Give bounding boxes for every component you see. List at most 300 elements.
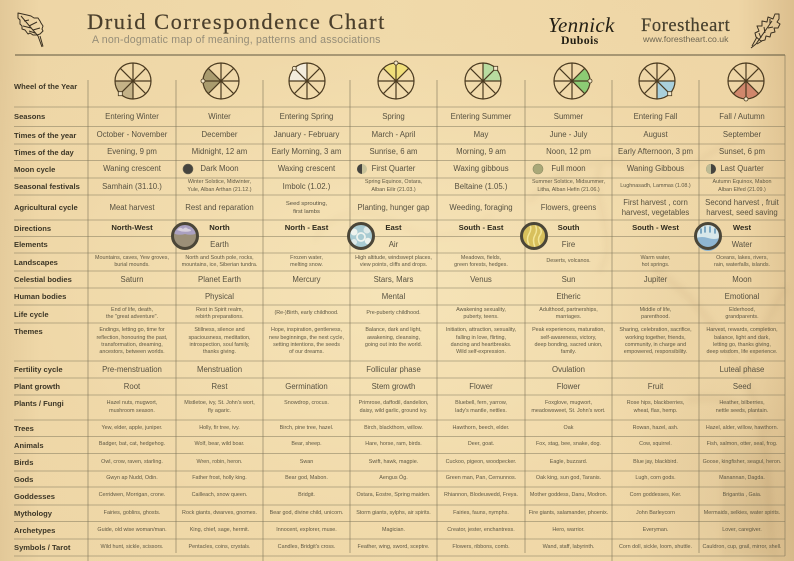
row: agricultural cycle: Agricultural cycle xyxy=(14,203,78,212)
row: gods: Aengus Óg. xyxy=(379,475,408,481)
row: agricultural cycle: Rest and reparation xyxy=(185,203,254,212)
row: themes: going out into the world. xyxy=(365,342,422,348)
row: fertility cycle xyxy=(14,365,764,374)
row: fertility cycle: Follicular phase xyxy=(366,365,421,374)
row: birds: Swan xyxy=(300,459,313,465)
row: directions: East xyxy=(385,223,402,232)
row: moon cycle: Waxing crescent xyxy=(278,164,335,173)
row: animals: Fish, salmon, otter, seal, frog. xyxy=(707,441,777,447)
row: plants and fungi: meadowsweet, St. John's wort. xyxy=(531,408,606,414)
row: landscapes: hot springs. xyxy=(642,262,669,268)
row: trees: Birch, pine tree, hazel. xyxy=(280,425,333,431)
row: themes: self-awareness, victory, xyxy=(541,335,596,341)
row: themes: Endings, letting go, time for xyxy=(99,327,165,333)
row: seasons: Entering Winter xyxy=(105,112,159,121)
row: mythology: Fairies, fauns, nymphs. xyxy=(453,510,509,516)
row: seasonal festivals: Autumn Equinox, Mabon xyxy=(712,179,772,185)
row: celestial bodies: Venus xyxy=(470,275,492,284)
row: directions: North-West xyxy=(111,223,153,232)
row: agricultural cycle xyxy=(14,198,779,216)
row: symbols and tarot: Pentacles, coins, crystals. xyxy=(188,544,251,550)
row: plant growth: Flower xyxy=(469,382,493,391)
row: themes: community, in charge and xyxy=(625,342,686,348)
row: agricultural cycle: first lambs xyxy=(293,208,320,214)
row: trees: Yew, elder, apple, juniper. xyxy=(102,425,162,431)
row: moon cycle: Moon cycle xyxy=(14,165,55,174)
row: trees: Birch, blackthorn, willow. xyxy=(364,425,423,431)
row: archetypes: Everyman. xyxy=(643,527,668,533)
row: gods: Gwyn ap Nudd, Odin. xyxy=(106,475,158,481)
row: seasonal festivals: Lughnasadh, Lammas (1.08.) xyxy=(620,183,691,189)
row: seasons: Fall / Autumn xyxy=(719,112,765,121)
row: animals: Badger, bat, cat, hedgehog. xyxy=(99,441,165,447)
row: symbols and tarot: Wild hunt, sickle, scissors. xyxy=(101,544,163,550)
row: landscapes: burial mounds. xyxy=(114,262,150,268)
row: gods: Bear god, Mabon. xyxy=(285,475,328,481)
row: archetypes: Magician. xyxy=(382,527,405,533)
row: life cycle: marriages. xyxy=(556,314,581,320)
row: directions: Directions xyxy=(14,224,51,233)
row: landscapes: Mountains, caves, Yew groves, xyxy=(95,255,169,261)
row: seasonal festivals: Alban Eilir (21.03.) xyxy=(371,186,416,192)
row: themes: letting go, thanks giving, xyxy=(713,342,771,348)
row: times of the year: May xyxy=(474,130,488,139)
row: times of the year: June - July xyxy=(550,130,587,139)
row: times of the year: August xyxy=(643,130,668,139)
row: agricultural cycle: Second harvest , fruit xyxy=(705,198,779,207)
row: landscapes: Meadows, fields, xyxy=(461,255,501,261)
row: landscapes xyxy=(14,255,770,268)
row: trees: Hazel, alder, willow, hawthorn. xyxy=(706,425,778,431)
wheel: entering fall xyxy=(639,63,675,99)
row: themes: ancestors, between worlds. xyxy=(99,349,165,355)
wheel: summer xyxy=(554,63,592,99)
row: fertility cycle: Fertility cycle xyxy=(14,365,63,374)
row: plant growth: Plant growth xyxy=(14,382,60,391)
row: agricultural cycle: Planting, hunger gap xyxy=(358,203,429,212)
row: symbols and tarot: Cauldron, cup, grail, mirror, shell. xyxy=(702,544,782,550)
row: goddesses: Ostara, Eostre, Spring maiden. xyxy=(356,492,430,498)
row: themes: setting intentions, the seeds xyxy=(273,342,340,348)
row: goddesses xyxy=(14,492,761,500)
row: animals: Bear, sheep. xyxy=(291,441,322,447)
row: birds: Eagle, buzzard. xyxy=(550,459,587,465)
row: symbols and tarot: Flowers, ribbons, comb. xyxy=(452,544,510,550)
row: directions xyxy=(14,223,751,233)
row: archetypes: Innocent, explorer, muse. xyxy=(276,527,337,533)
row: themes: transformation, dreaming, xyxy=(101,342,163,348)
row: trees xyxy=(14,424,778,433)
row: plants and fungi: Primrose, daffodil, dandelion, xyxy=(359,400,428,406)
row: life cycle: (Re-)Birth, early childhood. xyxy=(274,310,339,316)
row: human bodies: Etheric xyxy=(556,292,581,301)
row: animals: Hare, horse, ram, birds. xyxy=(365,441,422,447)
row: archetypes: Hero, warrior. xyxy=(552,527,585,533)
row: themes: new beginnings, the next cycle, xyxy=(269,335,344,341)
row: plant growth: Rest xyxy=(211,382,228,391)
row: life cycle: End of life, death, xyxy=(111,307,153,313)
row: goddesses: Cailleach, snow queen. xyxy=(192,492,247,498)
icon: water badge xyxy=(696,224,720,251)
row: animals: Cow, squirrel. xyxy=(639,441,672,447)
row: birds xyxy=(14,458,781,467)
row: seasons xyxy=(14,112,765,121)
row: celestial bodies: Saturn xyxy=(120,275,143,284)
row: times of the year: Times of the year xyxy=(14,131,76,140)
row: mythology: Mythology xyxy=(14,509,52,518)
row: times of the day: Early Morning, 3 am xyxy=(272,147,341,156)
row: plants and fungi: nettle seeds, plantain. xyxy=(716,408,768,414)
row: seasonal festivals: Winter Solstice, Midwinter, xyxy=(188,179,251,185)
row: symbols and tarot: Symbols / Tarot xyxy=(14,543,70,552)
row: plants and fungi: Foxglove, mugwort, xyxy=(545,400,592,406)
icon: air badge xyxy=(348,224,374,248)
row: agricultural cycle: Weeding, foraging xyxy=(449,203,513,212)
row: celestial bodies: Stars, Mars xyxy=(374,275,413,284)
icon: birch leaf xyxy=(18,12,44,48)
row: times of the day: Early Afternoon, 3 pm xyxy=(618,147,693,156)
icon: full moon xyxy=(533,164,543,174)
row: seasonal festivals: Summer Solstice, Midsummer, xyxy=(532,179,605,185)
row: archetypes: Archetypes xyxy=(14,526,55,535)
row: plant growth: Stem growth xyxy=(372,382,415,391)
row: themes: empowered, responsibility. xyxy=(624,349,687,355)
row: mythology: Fire giants, salamander, phoenix. xyxy=(529,510,608,516)
row: life cycle: Elderhood, xyxy=(729,307,755,313)
row: themes: dancing and heartbreaks. xyxy=(451,342,511,348)
row: human bodies: Mental xyxy=(382,292,405,301)
row: fertility cycle: Pre-menstruation xyxy=(102,365,162,374)
row: times of the year: September xyxy=(723,130,761,139)
row: themes: reflection, honouring the past, xyxy=(96,335,168,341)
row: themes: family. xyxy=(561,349,576,355)
row: elements: Fire xyxy=(562,240,575,249)
row: mythology: Mermaids, selkies, water spirits. xyxy=(704,510,780,516)
row: seasonal festivals: Alban Elfed (21.09.) xyxy=(718,186,766,192)
row: seasons: Seasons xyxy=(14,112,45,121)
row: fertility cycle: Ovulation xyxy=(552,365,585,374)
row: seasonal festivals: Imbolc (1.02.) xyxy=(283,182,330,191)
row: landscapes: Oceans, lakes, rivers, xyxy=(716,255,768,261)
row: landscapes: rain, waterfalls, islands. xyxy=(714,262,770,268)
row: animals: Fox, stag, bee, snake, dog. xyxy=(536,441,601,447)
author logo: Yennick Dubois: Yennick xyxy=(548,13,615,37)
row: trees: Trees xyxy=(14,424,34,433)
row: seasons: Spring xyxy=(382,112,405,121)
row: seasonal festivals: Beltaine (1.05.) xyxy=(455,182,507,191)
row: seasonal festivals: Litha, Alban Hefin (21.06.) xyxy=(537,186,600,192)
row: gods: Lugh, corn gods. xyxy=(635,475,676,481)
row: archetypes: Guide, old wise woman/man. xyxy=(97,527,167,533)
brand: Forestheart: Forestheart xyxy=(641,16,730,36)
row: themes: of our dreams. xyxy=(289,349,324,355)
row: life cycle: parenthood. xyxy=(641,314,670,320)
icon: oak leaf xyxy=(750,14,780,48)
row: archetypes: Lover, caregiver. xyxy=(722,527,762,533)
row: life cycle: Pre-puberty childhood. xyxy=(366,310,421,316)
row: times of the day: Evening, 9 pm xyxy=(107,147,157,156)
row: plants and fungi: Mistletoe, ivy, St. John's wort, xyxy=(184,400,255,406)
wheel: entering winter xyxy=(115,63,151,99)
row: plant growth: Flower xyxy=(557,382,580,391)
row: life cycle: Middle of life, xyxy=(640,307,671,313)
row: life cycle: rebirth preparations. xyxy=(195,314,244,320)
row: goddesses: Brigantia , Gaia. xyxy=(723,492,761,498)
row: seasonal festivals: Seasonal festivals xyxy=(14,182,80,191)
row: plants and fungi: Rose hips, blackberries, xyxy=(627,400,684,406)
row: mythology: Rock giants, dwarves, gnomes. xyxy=(182,510,257,516)
row: themes: working together, friends, xyxy=(625,335,686,341)
row: human bodies xyxy=(14,292,759,301)
row: landscapes: green forests, hedges. xyxy=(454,262,508,268)
row: human bodies: Physical xyxy=(205,292,234,301)
icon: fire badge xyxy=(522,224,546,248)
wheel: entering spring xyxy=(289,63,325,99)
row: themes: deep wisdom, life experience. xyxy=(706,349,778,355)
row: life cycle: the "great adventure". xyxy=(106,314,158,320)
row: themes: Peak experiences, maturation, xyxy=(532,327,605,333)
wheel: spring xyxy=(378,61,414,99)
row: mythology: Fairies, goblins, ghosts. xyxy=(104,510,160,516)
row: plants and fungi: Hazel nuts, mugwort, xyxy=(107,400,157,406)
row: plants and fungi: Snowdrop, crocus. xyxy=(284,400,329,406)
row: agricultural cycle: Seed sprouting, xyxy=(286,200,327,206)
row: life cycle: Adulthood, partnerships, xyxy=(539,307,598,313)
icon: last quarter moon xyxy=(706,164,716,174)
row: directions: North xyxy=(209,223,230,232)
author logo: Yennick Dubois: Dubois xyxy=(561,33,599,47)
row: wheel of the year label: Wheel of the Year xyxy=(14,82,77,90)
row: elements: Air xyxy=(389,240,398,249)
row: life cycle: puberty, teens. xyxy=(463,314,499,320)
row: landscapes: High altitude, windswept places, xyxy=(355,255,432,261)
row: goddesses: Rhiannon, Blodeuwedd, Freya. xyxy=(444,492,518,498)
row: plant growth: Germination xyxy=(285,382,328,391)
row: themes xyxy=(14,327,778,355)
title: Druid Correspondence Chart xyxy=(87,9,386,34)
row: moon cycle: Waning crescent xyxy=(103,164,161,173)
row: themes: introspection, soul family, xyxy=(189,342,250,348)
row: birds: Owl, crow, raven, starling. xyxy=(101,459,163,465)
row: life cycle: Rest in Spirit realm, xyxy=(196,307,243,313)
row: celestial bodies: Celestial bodies xyxy=(14,275,72,284)
row: goddesses: Mother goddess, Danu, Modron. xyxy=(530,492,607,498)
row: themes: thanks giving. xyxy=(203,349,236,355)
row: birds: Wren, robin, heron. xyxy=(196,459,243,465)
row: times of the year xyxy=(14,130,761,140)
row: goddesses: Bridgit. xyxy=(298,492,315,498)
row: times of the day: Midnight, 12 am xyxy=(192,147,247,156)
row: themes: Stillness, silence and xyxy=(194,327,245,333)
icon: first quarter moon xyxy=(357,164,367,174)
row: celestial bodies: Moon xyxy=(732,275,752,284)
row: times of the day: Sunrise, 6 am xyxy=(369,147,418,156)
row: seasons: Winter xyxy=(208,112,231,121)
row: times of the day: Sunset, 6 pm xyxy=(719,147,765,156)
wheel: fall xyxy=(728,63,764,101)
row: gods: Gods xyxy=(14,474,33,484)
row: plant growth: Root xyxy=(124,382,140,391)
row: goddesses: Corn goddesses, Ker. xyxy=(630,492,681,498)
row: landscapes: Warm water, xyxy=(640,255,671,261)
row: plants and fungi: lady's mantle, nettles. xyxy=(455,408,507,414)
row: seasons: Summer xyxy=(554,112,583,121)
row: human bodies: Human bodies xyxy=(14,292,66,301)
website url: www.forestheart.co.uk xyxy=(643,34,728,44)
row: goddesses: Cerridwen, Morrigan, crone. xyxy=(99,492,165,498)
row: agricultural cycle: Flowers, greens xyxy=(541,203,596,212)
row: gods xyxy=(14,474,765,484)
row: fertility cycle: Menstruation xyxy=(197,365,242,374)
row: elements: Elements xyxy=(14,240,48,249)
row: landscapes: Frozen water, xyxy=(290,255,323,261)
row: mythology: John Barleycorn xyxy=(636,510,675,516)
row: moon cycle: Full moon xyxy=(551,164,586,173)
row: trees: Holly, fir tree, ivy. xyxy=(199,425,240,431)
row: gods: Father frost, holly king. xyxy=(192,475,247,481)
icon: earth badge xyxy=(172,224,198,248)
row: times of the year: October - November xyxy=(97,130,167,139)
row: animals: Wolf, bear, wild boar. xyxy=(195,441,244,447)
row: goddesses: Goddesses xyxy=(14,492,55,500)
row: birds: Blue jay, blackbird. xyxy=(633,459,678,465)
row: life cycle: Life cycle xyxy=(14,310,49,318)
row: themes: Wild self-expression. xyxy=(456,349,506,355)
row: mythology: Bear god, divine child, unicorn. xyxy=(270,510,343,516)
row: landscapes: North and South pole, rocks, xyxy=(185,255,254,261)
row: gods: Manannan, Dagda. xyxy=(719,475,765,481)
row: directions: South - West xyxy=(632,223,679,232)
row: agricultural cycle: First harvest , corn xyxy=(623,198,688,207)
subtitle: A non-dogmatic map of meaning, patterns and associations xyxy=(92,34,381,46)
row: trees: Hawthorn, beech, elder. xyxy=(453,425,509,431)
row: birds: Swift, hawk, magpie. xyxy=(369,459,418,465)
row: symbols and tarot: Corn doll, sickle, loom, shuttle. xyxy=(619,544,692,550)
row: mythology xyxy=(14,509,780,518)
row: seasonal festivals: Samhain (31.10.) xyxy=(102,182,162,191)
row: moon cycle: First Quarter xyxy=(372,164,415,173)
row: elements xyxy=(14,240,752,249)
row: directions: West xyxy=(733,223,751,232)
row: themes: Sharing, celebration, sacrifice, xyxy=(619,327,692,333)
row: directions: North - East xyxy=(285,223,328,232)
row: life cycle: Awakening sexuality, xyxy=(456,307,506,313)
row: animals xyxy=(14,440,777,450)
row: seasonal festivals: Yule, Alban Arthan (21.12.) xyxy=(187,186,252,192)
row: gods: Oak king, sun god, Taranis. xyxy=(536,475,601,481)
row: plants and fungi: Heather, bilberries, xyxy=(719,400,765,406)
row: trees: Rowan, hazel, ash. xyxy=(633,425,678,431)
row: plants and fungi: Bluebell, fern, yarrow, xyxy=(455,400,507,406)
row: plants and fungi: daisy, wild garlic, ground ivy. xyxy=(360,408,427,414)
row: plant growth: Fruit xyxy=(648,382,663,391)
row: plants and fungi: Plants / Fungi xyxy=(14,399,64,408)
row: human bodies: Emotional xyxy=(725,292,759,301)
row: times of the day: Times of the day xyxy=(14,148,74,157)
row: symbols and tarot: Feather, wing, sword, sceptre. xyxy=(358,544,429,550)
row: elements: Water xyxy=(732,240,752,249)
row: agricultural cycle: harvest, seed saving xyxy=(706,208,778,216)
row: birds: Birds xyxy=(14,458,33,467)
row: mythology: Storm giants, sylphs, air spirits. xyxy=(356,510,431,516)
row: seasonal festivals xyxy=(14,179,772,192)
row: archetypes: Creator, jester, enchantress. xyxy=(447,527,515,533)
row: trees: Oak xyxy=(564,425,573,431)
row: directions: South xyxy=(558,223,579,232)
row: life cycle xyxy=(14,307,759,320)
row: times of the year: March - April xyxy=(372,130,415,139)
row: celestial bodies: Planet Earth xyxy=(198,275,241,284)
row: landscapes: Landscapes xyxy=(14,258,58,266)
row: times of the day: Noon, 12 pm xyxy=(546,147,591,156)
row: fertility cycle: Luteal phase xyxy=(720,365,764,374)
row: themes: falling in love, flirting, xyxy=(456,335,506,341)
row: plant growth: Seed xyxy=(733,382,751,391)
row: times of the day: Morning, 9 am xyxy=(456,147,506,156)
row: elements: Earth xyxy=(210,240,229,249)
row: animals: Animals xyxy=(14,440,44,450)
row: symbols and tarot: Candles, Bridgit's cross. xyxy=(278,544,335,550)
row: themes: Balance, dark and light, xyxy=(365,327,422,333)
row: seasons: Entering Spring xyxy=(280,112,333,121)
row: seasonal festivals: Spring Equinox, Ostara, xyxy=(365,179,422,185)
row: seasons: Entering Fall xyxy=(634,112,677,121)
row: animals: Deer, goat. xyxy=(468,441,494,447)
row: agricultural cycle: Meat harvest xyxy=(109,203,155,212)
row: themes: Hope, inspiration, gentleness, xyxy=(271,327,342,333)
row: plants and fungi: fly agaric. xyxy=(208,408,231,414)
row: moon cycle xyxy=(14,164,764,174)
row: themes: spaciousness, meditation, xyxy=(188,335,251,341)
row: celestial bodies xyxy=(14,275,752,284)
row: birds: Goose, kingfisher, seagul, heron. xyxy=(703,459,781,465)
row: plants and fungi: wheat, flax, hemp. xyxy=(634,408,677,414)
row: themes: Themes xyxy=(14,327,43,336)
row: moon cycle: Waxing gibbous xyxy=(453,164,509,173)
row: themes: Initiation, attraction, sexuality, xyxy=(446,327,516,333)
row: moon cycle: Dark Moon xyxy=(200,164,239,173)
row: moon cycle: Last Quarter xyxy=(720,164,764,173)
row: directions: South - East xyxy=(459,223,503,232)
row: symbols and tarot: Wand, staff, labyrinth. xyxy=(543,544,594,550)
row: themes: deep bonding, sacred union, xyxy=(534,342,603,348)
row: celestial bodies: Jupiter xyxy=(644,275,667,284)
row: landscapes: Deserts, volcanos. xyxy=(546,258,591,264)
row: agricultural cycle: harvest, vegetables xyxy=(622,208,689,216)
row: archetypes xyxy=(14,526,762,535)
row: plants and fungi: mushroom season. xyxy=(109,408,155,414)
row: seasons: Entering Summer xyxy=(451,112,511,121)
row: gods: Green man, Pan, Cernunnos. xyxy=(446,475,516,481)
row: plant growth xyxy=(14,382,751,391)
row: landscapes: view points, cliffs and drops. xyxy=(360,262,427,268)
row: times of the day xyxy=(14,147,765,157)
row: celestial bodies: Sun xyxy=(562,275,575,284)
row: symbols and tarot xyxy=(14,543,782,552)
row: landscapes: mountains, ice, Siberian tundra. xyxy=(182,262,257,268)
row: moon cycle: Waning Gibbous xyxy=(627,164,684,173)
row: archetypes: King, chief, sage, hermit. xyxy=(190,527,249,533)
row: times of the year: December xyxy=(202,130,237,139)
wheel of the year diagrams xyxy=(114,60,765,102)
wheel: entering summer xyxy=(465,63,501,99)
row: celestial bodies: Mercury xyxy=(292,275,321,284)
row: times of the year: January - February xyxy=(274,130,339,139)
row: landscapes: melting snow. xyxy=(290,262,323,268)
icon: dark moon xyxy=(183,164,193,174)
row: themes: awakening, cleansing, xyxy=(367,335,420,341)
row: life cycle: grandparents. xyxy=(725,314,759,320)
